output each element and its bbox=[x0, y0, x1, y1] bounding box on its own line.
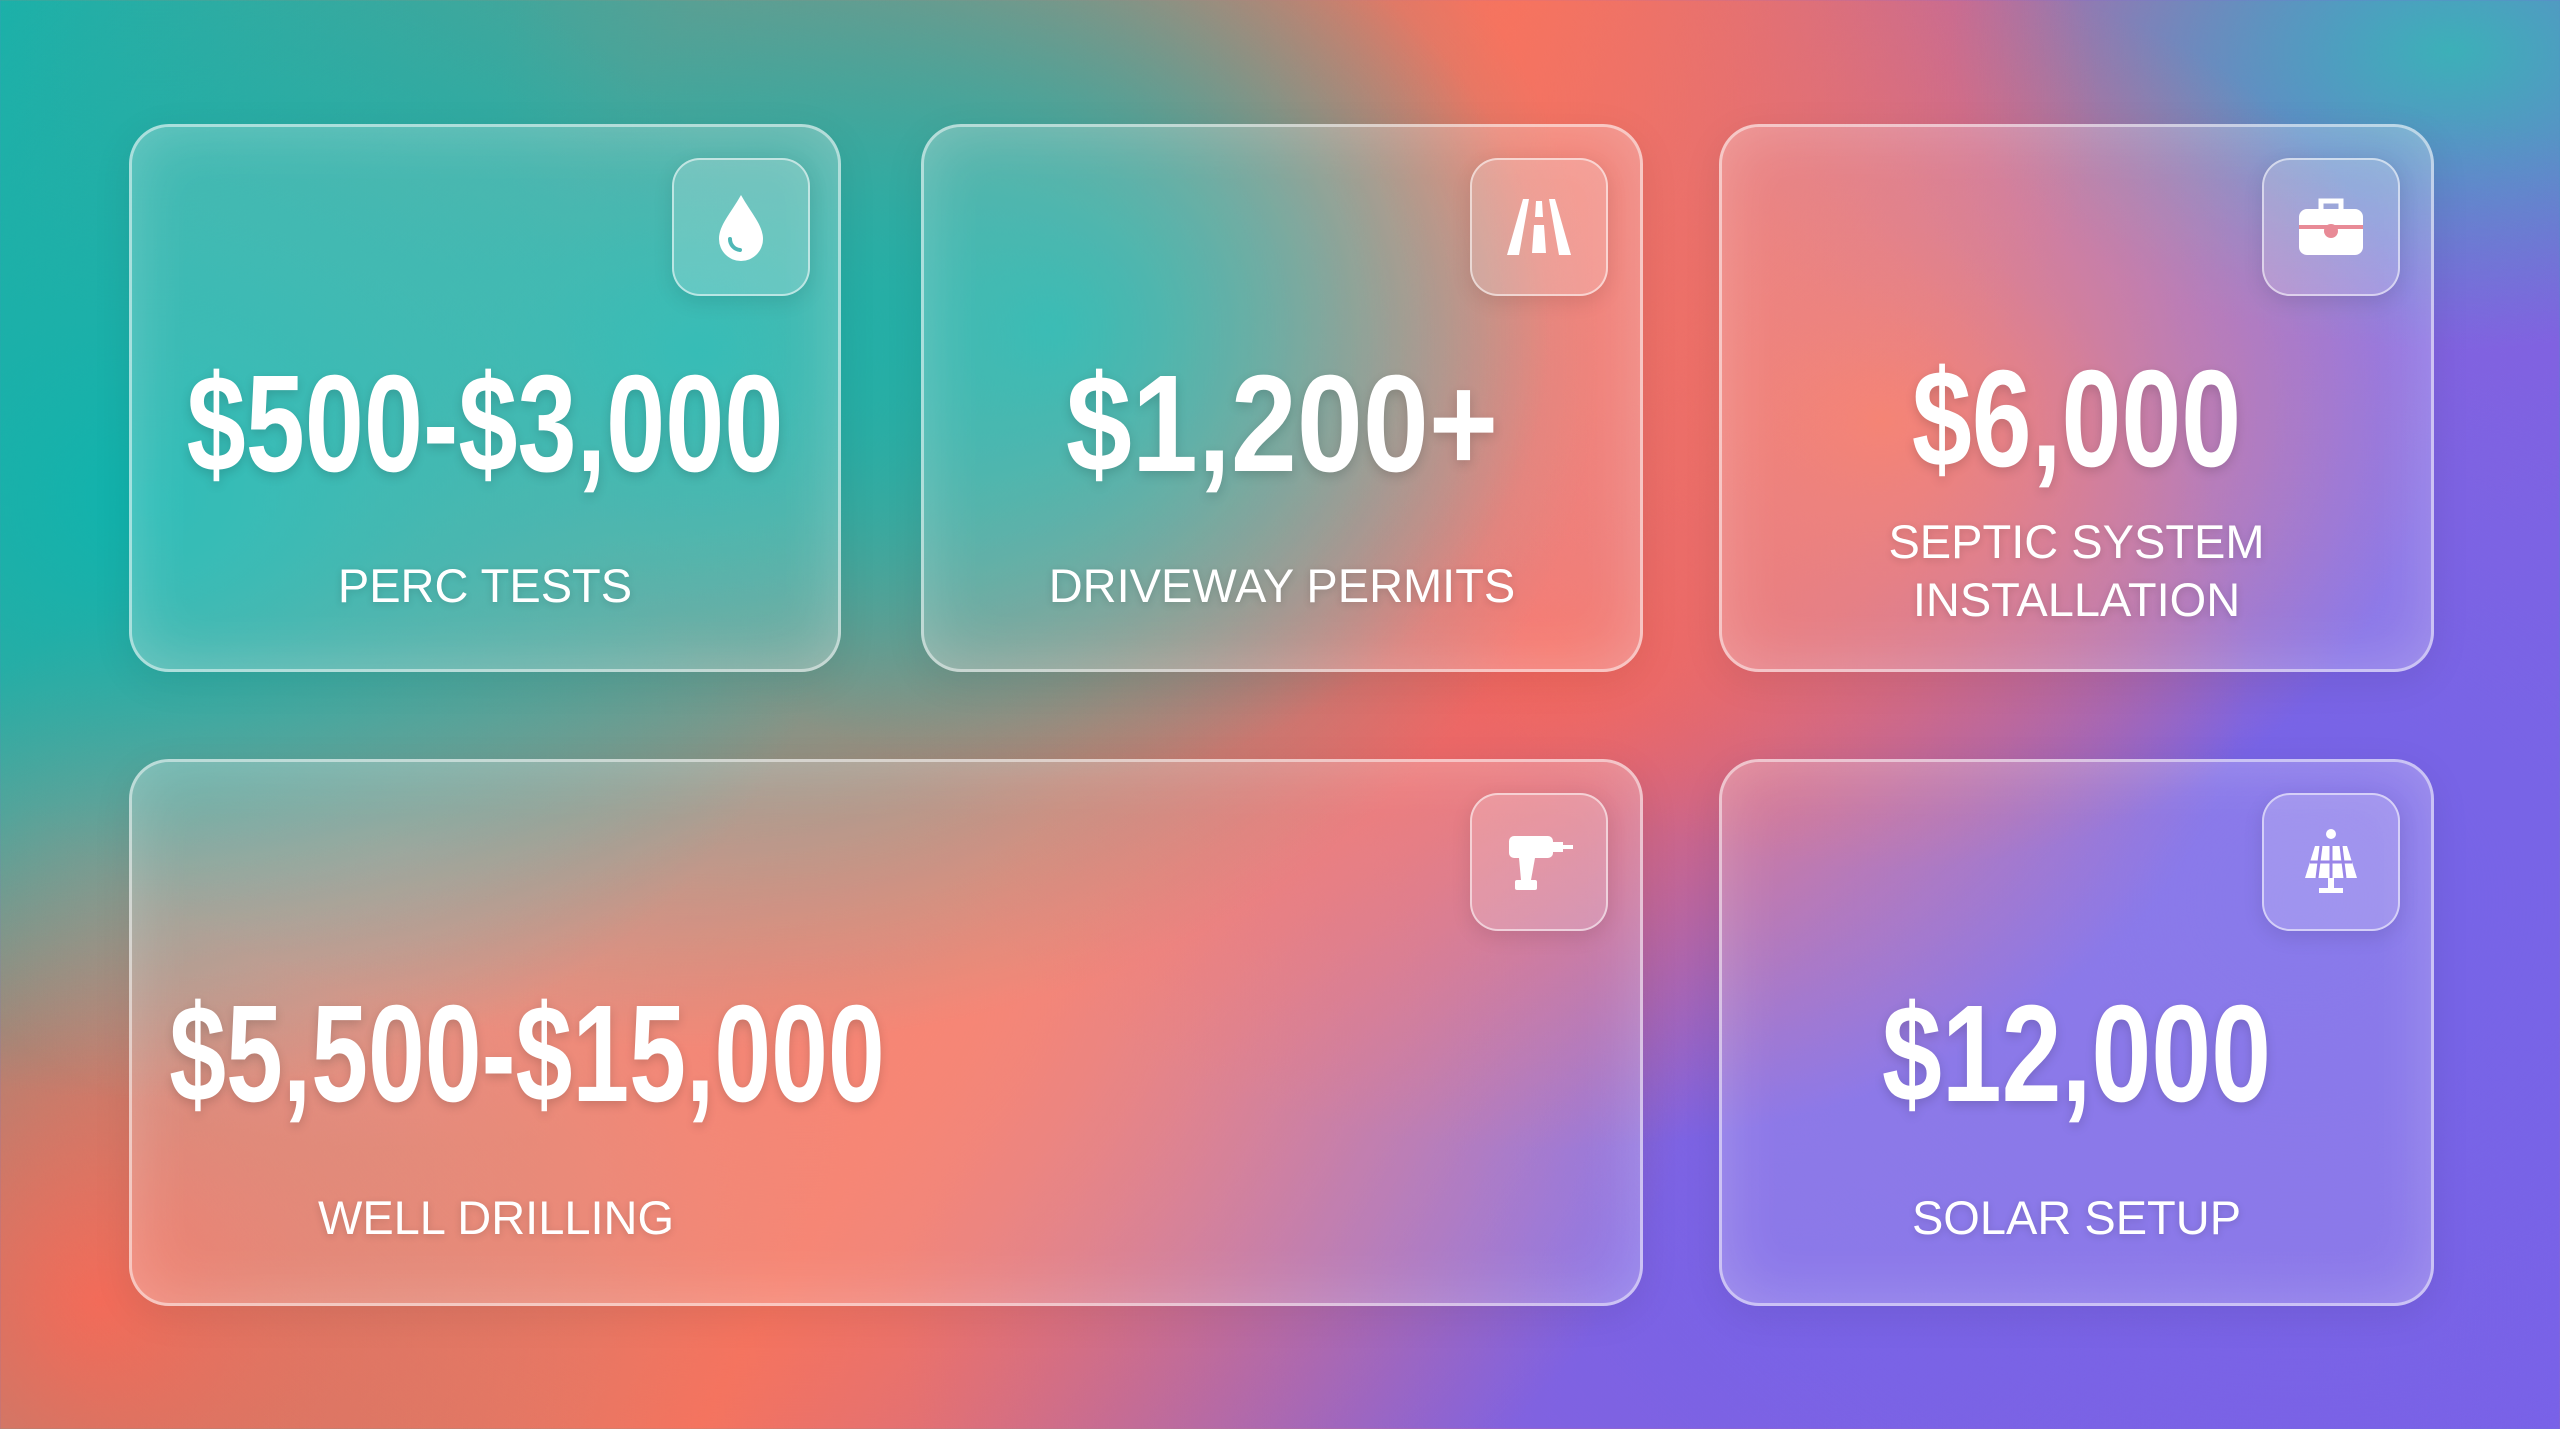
card: perc tests bbox=[129, 124, 841, 672]
label: PERC TESTS bbox=[338, 559, 632, 612]
label: INSTALLATION bbox=[1913, 573, 2240, 626]
label: SOLAR SETUP bbox=[1912, 1191, 2241, 1244]
price: $5,500-$15,000 bbox=[169, 977, 885, 1131]
price: $1,200+ bbox=[1066, 347, 1498, 501]
icon: solar panel bbox=[2262, 793, 2400, 931]
label: DRIVEWAY PERMITS bbox=[1049, 559, 1515, 612]
icon: road bbox=[1470, 158, 1608, 296]
label: WELL DRILLING bbox=[318, 1191, 674, 1244]
icon: water drop bbox=[672, 158, 810, 296]
price: $12,000 bbox=[1882, 977, 2271, 1131]
label bbox=[1888, 515, 2265, 626]
icon: drill bbox=[1470, 793, 1608, 931]
price: $6,000 bbox=[1912, 342, 2241, 496]
icon: toolbox bbox=[2262, 158, 2400, 296]
card: driveway permits bbox=[921, 124, 1643, 672]
price: $500-$3,000 bbox=[187, 347, 783, 501]
card: solar setup bbox=[1719, 759, 2434, 1306]
card: well drilling bbox=[129, 759, 1643, 1306]
label: SEPTIC SYSTEM bbox=[1888, 515, 2265, 568]
card: septic system bbox=[1719, 124, 2434, 672]
